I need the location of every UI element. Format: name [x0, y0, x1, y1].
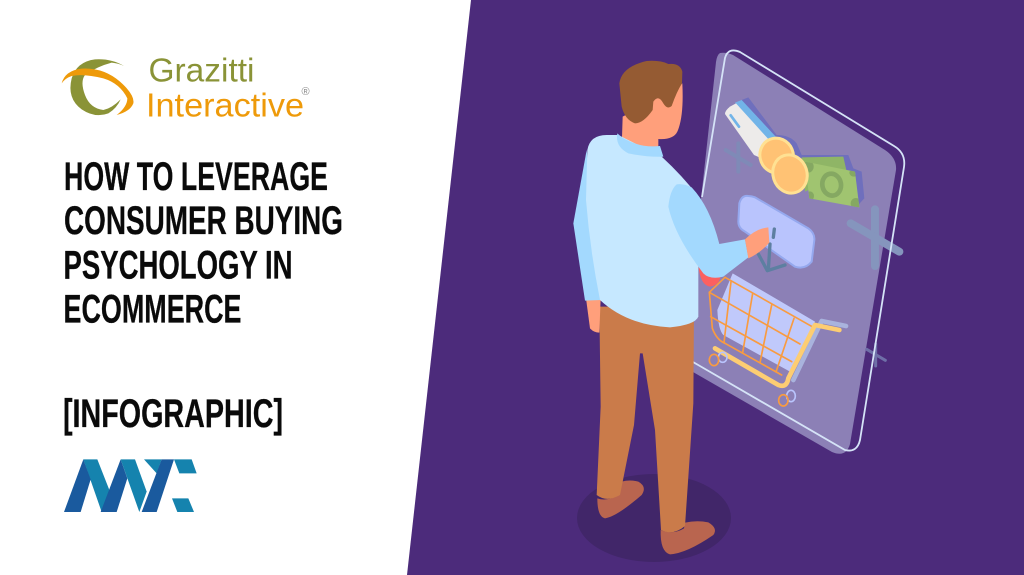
cart wire basket [709, 277, 813, 375]
icon: pointer arrow [758, 229, 785, 271]
trousers [597, 307, 694, 532]
neck and face [622, 83, 683, 147]
logo word: Grazitti: Grazitti [148, 52, 254, 88]
icon: cash [802, 157, 861, 209]
icon: credit card [725, 100, 777, 157]
right shoe [661, 521, 715, 554]
icon: payment items [725, 97, 899, 271]
red item [698, 265, 721, 287]
icon: olive crescent [70, 59, 124, 115]
trousers and shoes [597, 307, 715, 554]
panel: translucent shopping screen [690, 53, 896, 454]
cart wheels [709, 352, 795, 406]
icon: touch button [738, 196, 814, 268]
icon: small cross [726, 143, 751, 172]
pointing hand [745, 227, 769, 258]
subtitle: infographic tag: [INFOGRAPHIC] [63, 392, 283, 436]
cart shadow basket [717, 273, 815, 372]
icon: tiny cross [867, 344, 885, 366]
collar [617, 133, 663, 157]
cart shadow frame [793, 321, 846, 380]
title: ECOMMERCE [64, 288, 241, 332]
hair [619, 61, 682, 123]
title: HOW TO LEVERAGE [64, 155, 328, 199]
front sleeve [668, 184, 748, 278]
icon: large cross [851, 209, 899, 266]
icon: orange swoosh [62, 69, 133, 115]
registered mark: ® [302, 86, 310, 98]
logo: MTC mark [64, 459, 197, 512]
figure: man [573, 61, 769, 554]
left hand [586, 298, 601, 333]
logo word: Interactive: Interactive [146, 86, 304, 124]
panel outline [693, 50, 904, 451]
title: CONSUMER BUYING [64, 199, 343, 243]
title: PSYCHOLOGY IN [64, 244, 292, 288]
logo: Grazitti Interactive [62, 52, 310, 124]
purple background panel [407, 0, 1024, 575]
cart handle frame [715, 325, 839, 386]
payment shadow [742, 97, 864, 207]
sweater torso [586, 135, 698, 327]
upper body [573, 61, 769, 333]
icon: coins [755, 133, 812, 198]
left shoe [597, 480, 644, 518]
back sleeve [573, 150, 601, 301]
floor shadow [577, 474, 731, 562]
icon: shopping cart [709, 273, 885, 406]
title [64, 155, 343, 332]
